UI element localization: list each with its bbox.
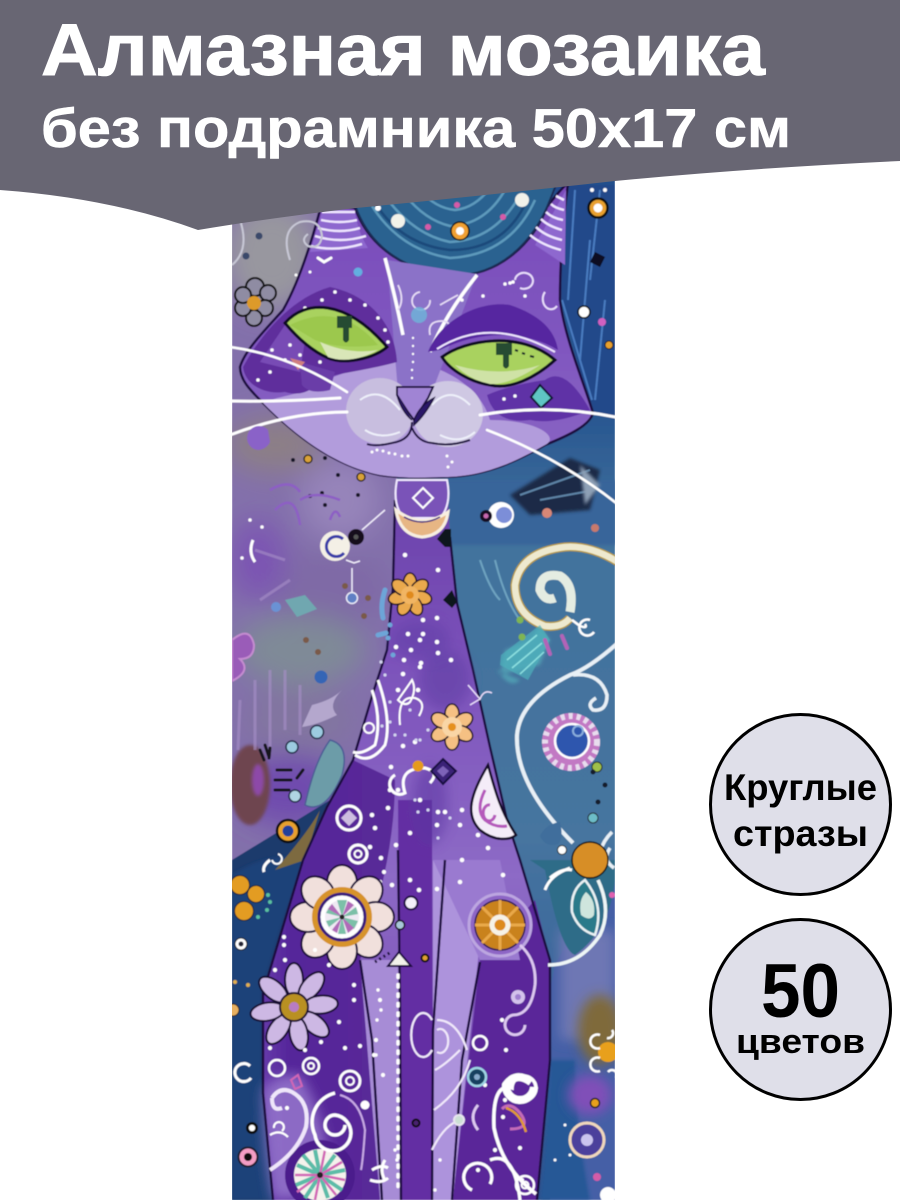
collar [396,480,448,537]
small left-edge ornaments [227,854,282,1166]
daisy [249,963,339,1052]
badge: 50 colours: 50 [761,949,840,1034]
small diamond and orange dot [412,759,456,784]
left eye [285,307,387,361]
badge: 50 colours [710,920,890,1100]
lower torso dots [270,872,522,1180]
badge: round rhinestones: стразы [733,813,868,854]
blue area top right [578,190,613,349]
right eye [442,341,555,386]
header banner [0,0,900,230]
neck ornaments [242,502,599,608]
whiskers [230,347,620,506]
orange flowers on torso [387,573,475,750]
mandala [285,1140,355,1200]
white S curves [517,641,620,872]
orange ball and paisley right [545,842,615,965]
cream spiral [515,547,618,636]
cheek patch [487,376,590,421]
gray swirl top left [232,220,322,265]
badge: round rhinestones [710,714,890,894]
blue-green patch [500,625,550,680]
lower right curls [454,945,536,1200]
pink paisley [471,765,516,839]
cat body [263,480,550,1200]
lower right ornaments [555,1030,618,1200]
left eye patch [243,287,397,394]
badge: 50 colours: цветов [736,1023,865,1061]
orange disc flower [469,894,531,956]
title line 1: Алмазная мозаика [41,10,767,91]
curls lower left [269,1058,388,1182]
cat head [240,175,593,478]
badge: round rhinestones: Круглые [724,767,877,808]
big cream flower [290,865,394,969]
painting: purple cat [224,175,622,1200]
top dome between the ears [355,188,556,274]
lower face lavender [263,362,550,478]
flower upper left [235,278,276,326]
paisleys and curls on torso [337,680,492,863]
muzzle [346,378,483,447]
orange cluster left [230,876,270,920]
left background wash [224,175,397,1200]
central dotted line and triangle [375,896,470,1190]
left middle details [232,550,393,872]
right background texture [445,185,622,1200]
torso dots [370,555,503,905]
title line 2: без подрамника 50х17 см [41,97,791,159]
eye ornament [540,713,605,854]
right eye lid [428,304,558,352]
